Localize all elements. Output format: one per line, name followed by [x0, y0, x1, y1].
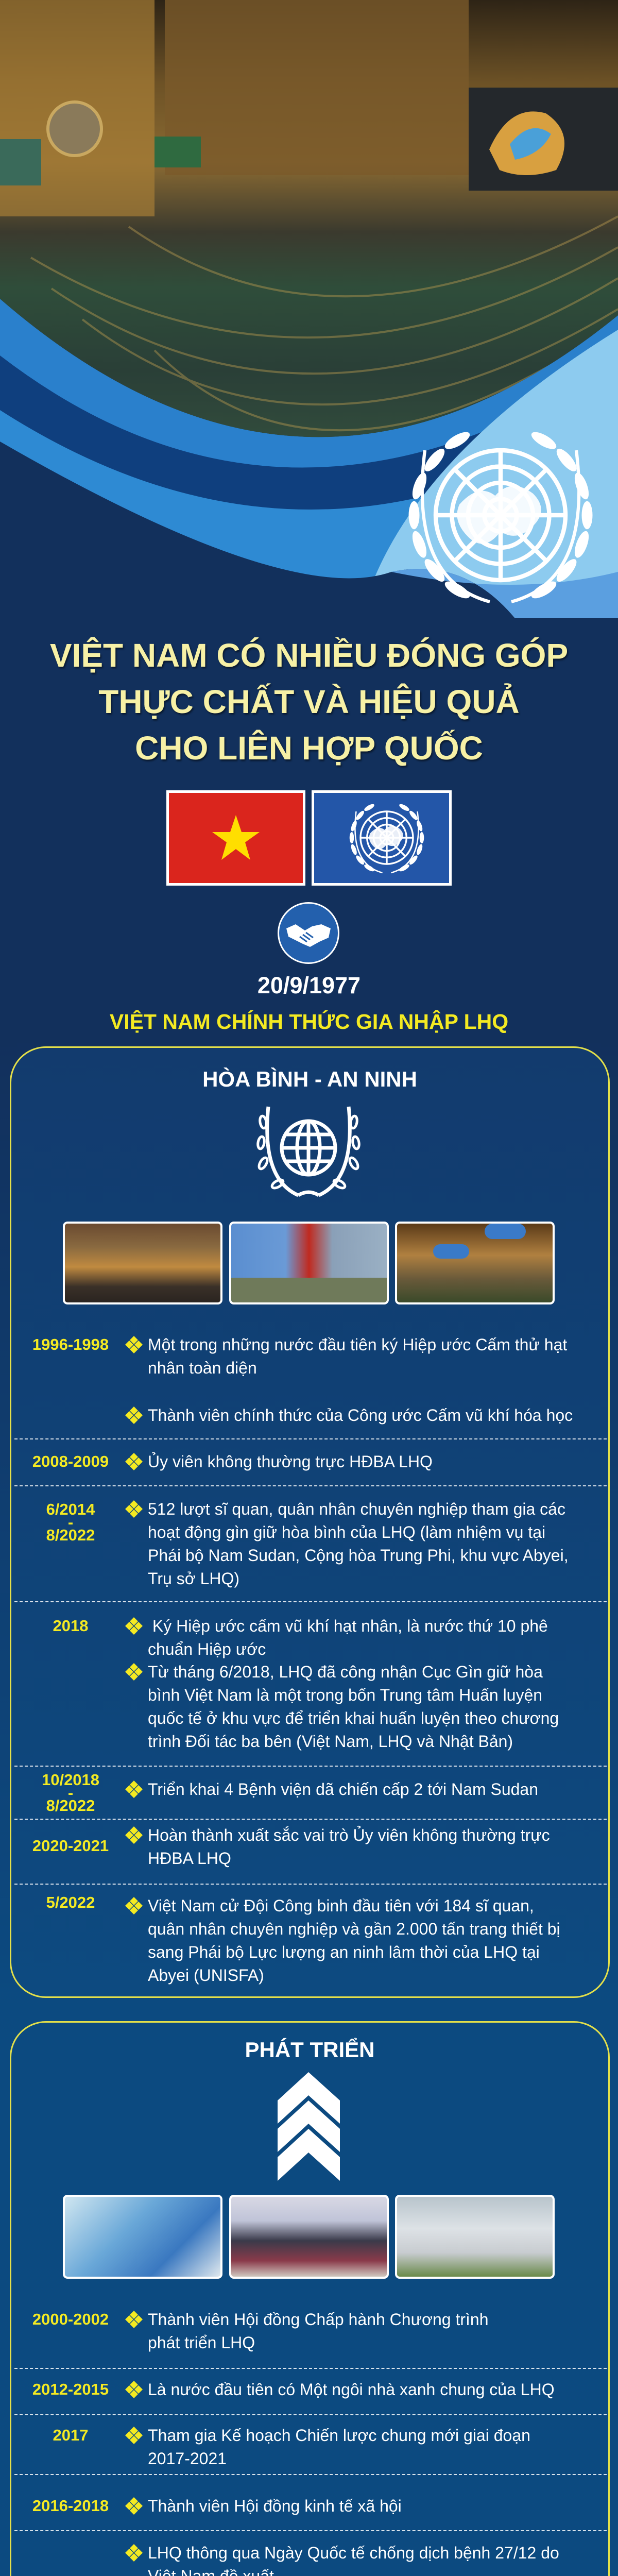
photo: peacekeepers with flags [229, 1222, 389, 1304]
row: 1996-1998: Một trong những nước đầu tiên ký Hiệp ước Cấm thử hạt [148, 1335, 567, 1354]
row: 10/2018 - 8/2022 [42, 1771, 538, 1815]
row: 2020-2021 [32, 1826, 550, 1868]
row: 2012-2015: 2012-2015 [32, 2380, 109, 2398]
title: CHO LIÊN HỢP QUỐC [135, 730, 483, 767]
icon: handshake [278, 902, 339, 964]
icon: triple chevron up [278, 2072, 340, 2181]
row: 6/2014 - 8/2022: Phái bộ Nam Sudan, Cộng hòa Trung Phi, khu vực Abyei, [148, 1546, 569, 1565]
row: 2017: 2017-2021 [148, 2449, 227, 2468]
icon: UN emblem (hero) [409, 429, 592, 602]
row: 2018: bình Việt Nam là một trong bốn Trung tâm Huấn luyện [148, 1686, 542, 1704]
row: 2020-2021: LHQ thông qua Ngày Quốc tế chống dịch bệnh 27/12 do [148, 2544, 559, 2562]
photo: green UN house [395, 2195, 555, 2279]
row: 1996-1998: Thành viên chính thức của Công ước Cấm vũ khí hóa học [148, 1406, 573, 1425]
row: 10/2018 - 8/2022: 10/2018 [42, 1771, 99, 1789]
row: 6/2014 - 8/2022 [46, 1500, 569, 1588]
row: 2016-2018: 2016-2018 [32, 2497, 109, 2515]
row: 5/2022 [46, 1893, 560, 1985]
photo: surgeons [63, 2195, 222, 2279]
row: 2008-2009: 2008-2009 [32, 1452, 109, 1470]
row: 2017: 2017 [53, 2426, 88, 2444]
row: 2000-2002 [32, 2310, 488, 2352]
row: 2000-2002: Thành viên Hội đồng Chấp hành Chương trình [148, 2310, 488, 2329]
row: 6/2014 - 8/2022: 6/2014 [46, 1500, 95, 1518]
row: 2018: chuẩn Hiệp ước [148, 1640, 266, 1658]
row: 2018 [53, 1617, 559, 1751]
row: 2012-2015: Là nước đầu tiên có Một ngôi nhà xanh chung của LHQ [148, 2380, 555, 2399]
row: 2020-2021: 2020-2021 [32, 1837, 109, 1855]
heading: PHÁT TRIỂN [245, 2038, 375, 2062]
row: 2008-2009: Ủy viên không thường trực HĐBA LHQ [148, 1452, 433, 1471]
row: 2020-2021 [125, 2544, 559, 2576]
row: 2016-2018 [32, 2497, 402, 2515]
title: VIỆT NAM CÓ NHIỀU ĐÓNG GÓP [50, 637, 568, 674]
row: 5/2022: 5/2022 [46, 1893, 95, 1911]
row: 10/2018 - 8/2022: 8/2022 [46, 1797, 95, 1815]
row: 2018: quốc tế ở khu vực để triển khai huấn luyện theo chương [148, 1709, 559, 1727]
title: THỰC CHẤT VÀ HIỆU QUẢ [98, 683, 520, 720]
heading: HÒA BÌNH - AN NINH [202, 1067, 417, 1091]
row: 6/2014 - 8/2022: 512 lượt sĩ quan, quân nhân chuyên nghiệp tham gia các [148, 1500, 565, 1518]
row: 5/2022: sang Phái bộ Lực lượng an ninh lâm thời của LHQ tại [148, 1943, 540, 1961]
panel: hòa bình - an ninh [10, 1046, 610, 1998]
row: 6/2014 - 8/2022: hoạt động gìn giữ hòa bình của LHQ (làm nhiệm vụ tại [148, 1523, 545, 1541]
row: 2018: trình Đối tác ba bên (Việt Nam, LHQ và Nhật Bản) [148, 1732, 513, 1751]
photo: security council [63, 1222, 222, 1304]
row: 2017: Tham gia Kế hoạch Chiến lược chung mới giai đoạn [148, 2426, 530, 2445]
row: 1996-1998: nhân toàn diện [148, 1359, 257, 1377]
icon: globe with laurel wreath [256, 1107, 360, 1197]
row: 10/2018 - 8/2022: - [68, 1784, 73, 1802]
photo: blue beret soldiers [395, 1222, 555, 1304]
row: 2020-2021: HĐBA LHQ [148, 1849, 231, 1868]
row: 6/2014 - 8/2022: - [68, 1513, 73, 1531]
flag: Vietnam [166, 790, 305, 886]
flag: United Nations [312, 790, 452, 886]
row: 2018: Từ tháng 6/2018, LHQ đã công nhận Cục Gìn giữ hòa [148, 1663, 543, 1681]
title [50, 637, 569, 768]
row: 6/2014 - 8/2022: 8/2022 [46, 1526, 95, 1544]
row: 2000-2002: 2000-2002 [32, 2310, 109, 2328]
row: 1996-1998 [32, 1335, 573, 1425]
row: 5/2022: quân nhân chuyên nghiệp và gần 2.000 tấn trang thiết bị [148, 1920, 560, 1938]
row: 6/2014 - 8/2022: Trụ sở LHQ) [148, 1569, 239, 1588]
row: 2017 [53, 2426, 530, 2468]
date: 20/9/1977: 20/9/1977 [258, 972, 360, 998]
panel: phát triển [10, 2021, 610, 2576]
row: 2016-2018: Thành viên Hội đồng kinh tế xã hội [148, 2497, 402, 2515]
row: 10/2018 - 8/2022: Triển khai 4 Bệnh viện dã chiến cấp 2 tới Nam Sudan [148, 1780, 538, 1799]
row: 5/2022: Việt Nam cử Đội Công binh đầu tiên với 184 sĩ quan, [148, 1896, 534, 1915]
photo: general assembly hall [0, 0, 618, 464]
row: 2018: Ký Hiệp ước cấm vũ khí hạt nhân, là nước thứ 10 phê [152, 1617, 548, 1635]
row: 2018: 2018 [53, 1617, 88, 1635]
photo: signing ceremony [229, 2195, 389, 2279]
subtitle: VIỆT NAM CHÍNH THỨC GIA NHẬP LHQ [110, 1010, 508, 1033]
hero: assembly hall photo with blue waves and UN emblem [0, 0, 618, 618]
row: 1996-1998: 1996-1998 [32, 1335, 109, 1353]
row: 5/2022: Abyei (UNISFA) [148, 1966, 264, 1985]
row: 2020-2021: Hoàn thành xuất sắc vai trò Ủy viên không thường trực [148, 1826, 550, 1844]
row: 2000-2002: phát triển LHQ [148, 2333, 255, 2352]
